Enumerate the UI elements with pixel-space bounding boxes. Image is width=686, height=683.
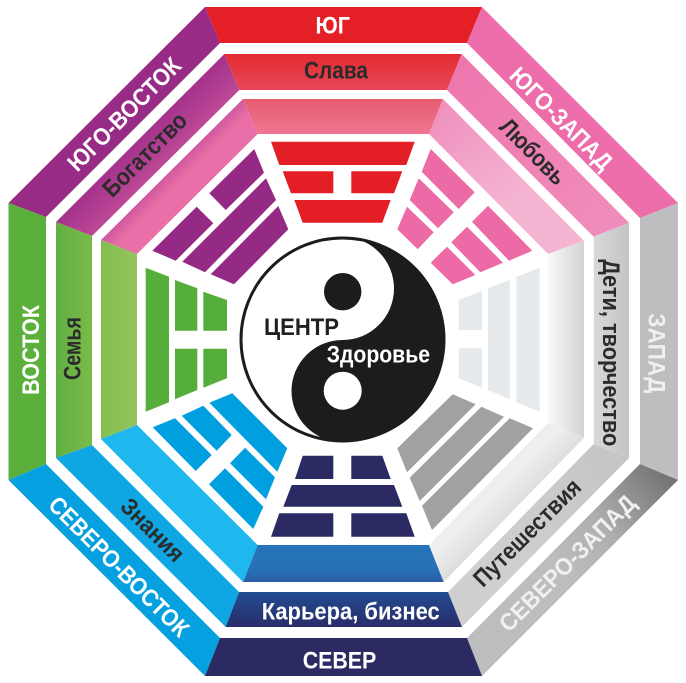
band: east: ВОСТОК	[18, 305, 45, 395]
sector: glory	[224, 54, 462, 90]
band: north	[205, 638, 482, 676]
inner ring segments	[101, 99, 584, 582]
centre label: ЦЕНТР	[264, 314, 339, 341]
trigram: south-east (purple)	[152, 149, 288, 284]
band: north-east: СЕВЕРО-ВОСТОК	[43, 491, 194, 643]
sector: family	[56, 222, 92, 458]
trigram: north-west (grey)	[397, 394, 533, 530]
sector: glory: Слава	[304, 57, 369, 84]
trigram: east (green)	[146, 268, 227, 412]
sector: wealth: Богатство	[97, 107, 193, 203]
sector: children, creativity	[594, 223, 629, 458]
sector: children, creativity: Дети, творчество	[597, 259, 624, 446]
band: north-east	[8, 464, 220, 676]
sector: love: Любовь	[494, 113, 571, 191]
trigram: north (navy)	[271, 456, 415, 537]
band: south-west	[467, 7, 678, 218]
sector: wealth	[56, 54, 239, 236]
band: south-east: ЮГО-ВОСТОК	[62, 52, 187, 177]
sector: travel	[448, 444, 629, 627]
sector: knowledge: Знания	[115, 493, 190, 568]
trigram: south (red)	[271, 142, 415, 223]
trigram: west (pale grey)	[459, 268, 540, 412]
sector: love	[447, 54, 629, 237]
sector: knowledge	[56, 445, 239, 627]
yin-yang centre	[241, 237, 445, 442]
band: south	[205, 7, 482, 43]
trigram: north-east (blue)	[153, 393, 287, 529]
trigram: south-west (pink)	[397, 149, 532, 284]
sector: career, business	[226, 592, 462, 627]
sector: travel: Путешествия	[468, 474, 587, 593]
band: north: СЕВЕР	[303, 647, 376, 674]
band: west	[640, 203, 678, 480]
sector: family: Семья	[60, 317, 86, 380]
band: south-west: ЮГО-ЗАПАД	[504, 62, 618, 176]
band: south: ЮГ	[316, 12, 350, 39]
band: west: ЗАПАД	[642, 313, 669, 393]
sector: career, business: Карьера, бизнес	[262, 598, 440, 625]
band: south-east	[8, 7, 220, 217]
band: north-west: СЕВЕРО-ЗАПАД	[494, 490, 642, 638]
band: north-west	[467, 464, 678, 676]
health label: Здоровье	[327, 342, 430, 369]
band: east	[8, 203, 46, 480]
